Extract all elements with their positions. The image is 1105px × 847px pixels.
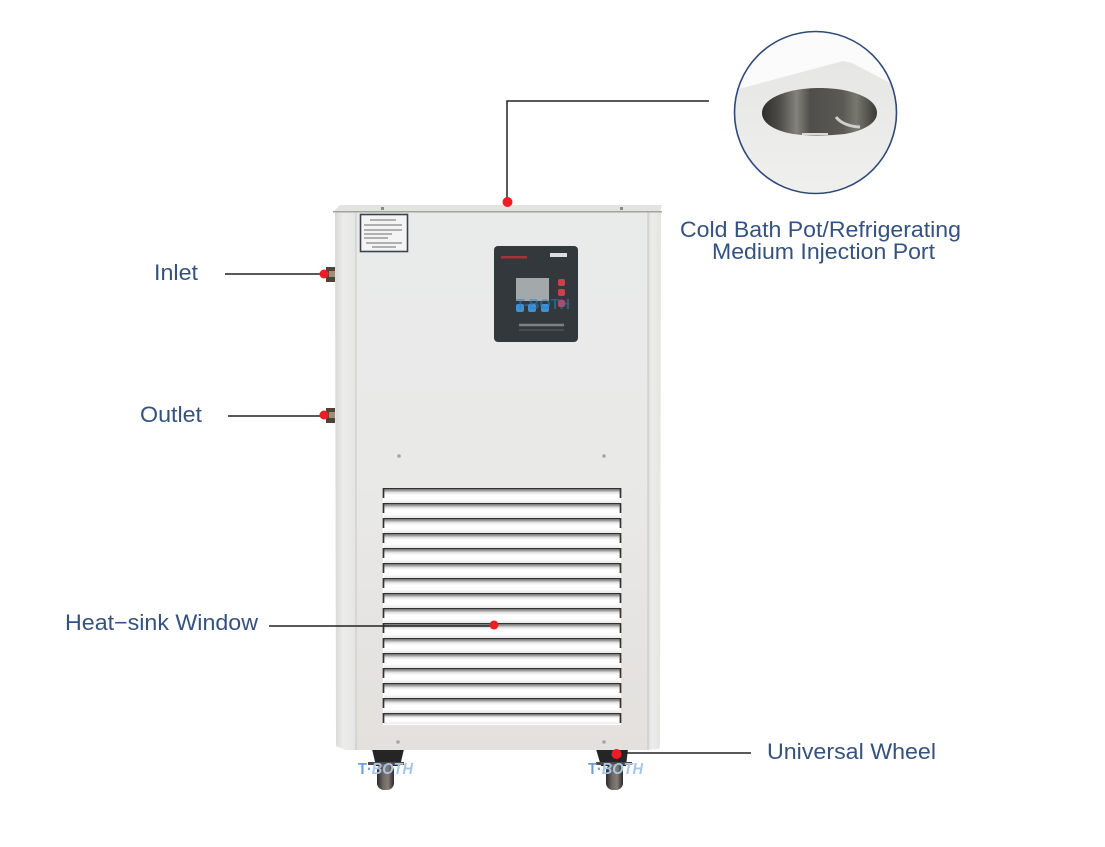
heat-sink louvers [383, 488, 621, 725]
label: cold bath pot: Cold Bath Pot/Refrigerating [680, 217, 961, 242]
label: outlet: Outlet [140, 402, 202, 427]
label: inlet: Inlet [154, 260, 198, 285]
specification nameplate [360, 214, 408, 252]
leader: inlet [225, 270, 328, 278]
display screen [516, 278, 549, 301]
product: cooling circulator unit [326, 205, 662, 790]
red buttons [558, 279, 565, 307]
control panel [494, 246, 578, 342]
left caster wheel [368, 749, 404, 790]
model tag [550, 253, 567, 257]
leader: heat-sink window [269, 620, 498, 630]
leader: universal wheel [612, 749, 751, 759]
cabinet left side strip [335, 212, 358, 750]
right watermark: T·BOTH [588, 761, 643, 778]
panel watermark: T-BOTH [516, 296, 570, 313]
cabinet right side strip [647, 212, 661, 750]
leader: outlet [228, 410, 328, 420]
right caster wheel [596, 749, 632, 790]
detail callout: cold bath pot [730, 31, 900, 200]
brand mark [501, 256, 527, 258]
inset circle outline [734, 32, 896, 194]
pot opening [762, 88, 877, 136]
inlet fitting [326, 267, 335, 282]
panel company text [519, 324, 564, 326]
cabinet front panel [356, 212, 648, 750]
label: cold bath pot [680, 217, 961, 264]
blue buttons [516, 304, 549, 312]
label: heat-sink window: Heat−sink Window [65, 610, 258, 635]
outlet fitting [326, 408, 335, 423]
screws [396, 454, 606, 744]
label: cold bath pot: Medium Injection Port [712, 239, 935, 264]
infographic canvas [66, 30, 960, 790]
left watermark: T·BOTH [358, 761, 413, 778]
label: universal wheel: Universal Wheel [767, 739, 936, 764]
cabinet top lid [333, 205, 662, 212]
inset circle photo [735, 61, 896, 192]
leader: cold bath pot [502, 101, 709, 207]
